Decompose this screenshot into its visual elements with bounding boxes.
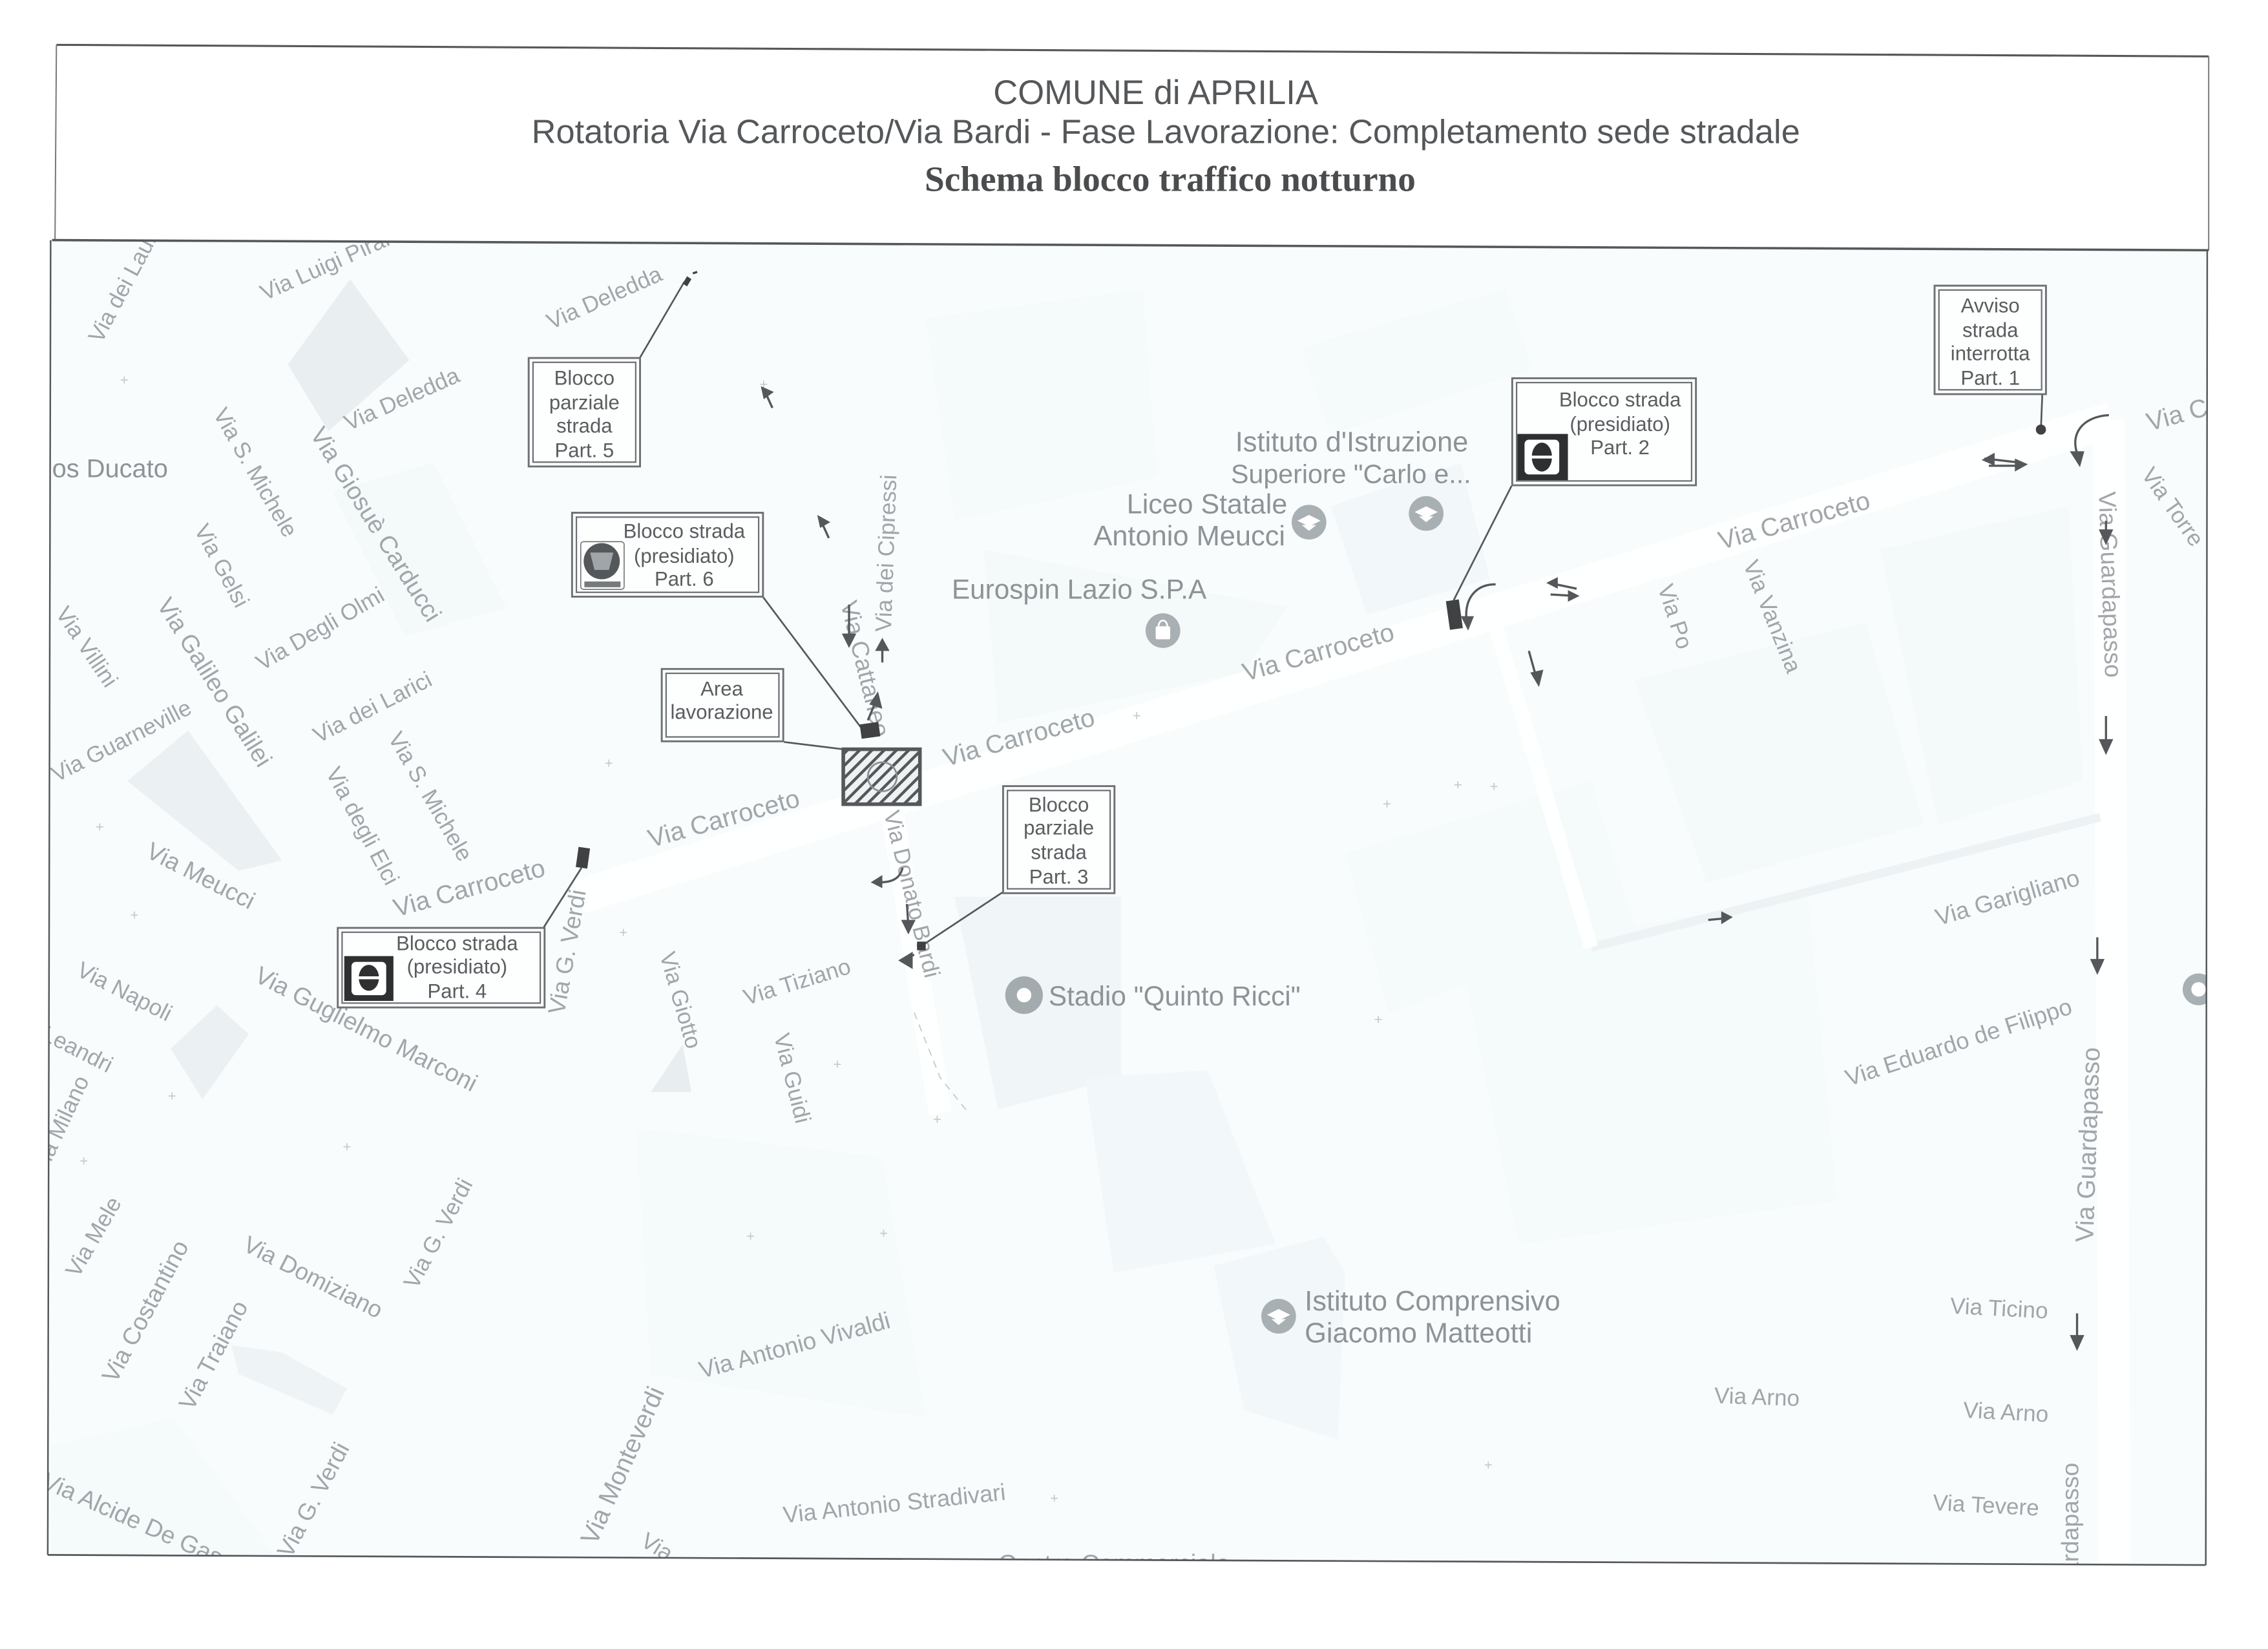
callout: Blocco parziale Part. 5 [529,272,697,467]
street: Via Carroceto 2: Via Carroceto [645,784,803,853]
place label: Liceo Statale [1093,489,1287,552]
street: Via G. Verdi mid: Via G. Verdi [399,1174,478,1292]
arrow: curved Part. 1 [2070,415,2109,467]
street: Via Carroceto 4: Via Carroceto [1239,618,1397,687]
place label: os Ducato: os Ducato [52,455,168,483]
title: Comune di Aprilia: COMUNE di APRILIA [993,74,1318,112]
street: Via Tevere: Via Tevere [1932,1490,2040,1521]
arrow: south Via Ticino [2070,1314,2084,1351]
minor map markers: + [1133,708,1141,724]
icon: school Liceo [1292,505,1327,540]
minor map markers: + [79,1153,88,1169]
place label: Eurospin: Eurospin Lazio S.P.A [952,574,1207,605]
street: Via Mele: Via Mele [61,1193,127,1281]
place label: Liceo Statale: Antonio Meucci [1093,521,1285,552]
street: Via Vanzina: Via Vanzina [1738,556,1806,677]
arrow: south Via Guardapasso 2 [2099,716,2113,755]
place label: Istituto Comprensivo: Istituto Comprensivo [1305,1286,1560,1317]
street: Via Guarneville: Via Guarneville [47,695,196,787]
street: Via dei Lauri: Via dei Lauri [83,224,165,347]
callout: Avviso strada interrotta Part. 1: Part. 1 [1960,366,2020,389]
callout: Blocco strada Part. 2 [1446,378,1696,630]
street: Via Carroceto 5: Via Carroceto [1715,486,1873,555]
street: Via Ticino: Via Ticino [1949,1294,2049,1323]
callout: Blocco parziale Part. 5: Blocco [554,366,614,389]
callout: Blocco strada Part. 2: Part. 2 [1590,436,1650,459]
callout: Blocco strada Part. 6 [572,513,880,739]
minor map markers: + [879,1225,888,1241]
street: Via Eduardo de Filippo: Via Eduardo de Filippo [1842,993,2075,1091]
street: Via Giosuè Carducci: Via Giosuè Carducci [304,423,446,627]
place label: Istituto Comprensivo [1305,1286,1560,1349]
callout: Blocco strada Part. 6: (presidiato) [634,545,735,567]
street: Via Deledda: Via Deledda [341,362,463,436]
arrow: two way Part. 1 [1982,453,2028,472]
callout: Blocco strada Part. 4 [338,847,590,1007]
minor map markers: + [120,372,129,388]
street: Via dei Larici: Via dei Larici [309,667,436,748]
callout: Blocco strada Part. 2: (presidiato) [1570,413,1670,436]
street: Via degli Elci: Via degli Elci [321,763,404,889]
arrow: Via Bardi south west [898,952,914,969]
street: Via Degli Olmi: Via Degli Olmi [252,582,388,676]
minor map markers: + [933,1111,941,1127]
minor map markers: + [96,819,104,835]
minor map markers: + [759,376,768,392]
street: Via Traiano: Via Traiano [174,1296,253,1414]
callout: Blocco parziale Part. 5: parziale [549,391,620,414]
subtitle: fase lavorazione: Rotatoria Via Carroceto/Via Bardi - Fase Lavorazione: Completamento sede stradale [532,114,1800,151]
minor map markers: + [605,755,613,772]
callout: Blocco strada Part. 4: (presidiato) [407,956,507,978]
callout: Avviso strada interrotta Part. 1: interrotta [1951,342,2030,364]
callout: Blocco parziale Part. 3: Part. 3 [1029,866,1088,888]
arrow: south Via Guardapasso 3 [2090,938,2105,975]
callout: Blocco strada Part. 4: Part. 4 [428,980,487,1003]
street: Via Antonio Vivaldi: Via Antonio Vivaldi [696,1307,893,1383]
icon: place marker right edge [2183,974,2214,1005]
heading: schema blocco traffico: Schema blocco traffico notturno [925,159,1416,198]
street: Via Guglielmo Marconi: Via Guglielmo Marconi [251,961,481,1097]
street: Via Deledda north: Via Deledda [543,261,666,335]
place label: Istituto Comprensivo: Giacomo Matteotti [1305,1318,1532,1349]
callout: Avviso strada interrotta Part. 1 [1935,286,2046,435]
street: Via Meucci: Via Meucci [142,837,260,914]
arrow: Via Bardi south [901,904,916,934]
street: Centro Commerciale: Centro Commerciale [998,1550,1230,1578]
street: Via Domiziano: Via Domiziano [239,1231,387,1323]
header panel [55,45,2209,250]
place label: Istituto d'Istruzione: Superiore "Carlo e... [1231,459,1471,489]
minor map markers: + [746,1228,755,1245]
street: Via Villini: Via Villini [50,602,123,692]
street: Via Leandri: Via Leandri [3,1003,117,1078]
arrow: Via Bardi west turn [871,868,903,888]
street: Via Guardapasso bottom: Via Guardapasso [2057,1463,2084,1649]
street: Via Alcide De Gasperi: Via Alcide De Gasperi [38,1467,264,1587]
street: Via Garigliano: Via Garigliano [1933,865,2083,930]
street: Via G. Verdi south: Via G. Verdi [272,1438,355,1562]
callout: Blocco strada Part. 2: Blocco strada [1559,388,1681,411]
arrow: south Via Cattaneo [842,605,856,648]
arrow: north Via Deledda [761,386,774,408]
minor map markers: + [619,925,627,941]
street: Via Tiziano: Via Tiziano [740,954,854,1010]
icon: school Matteotti [1261,1299,1296,1334]
place label: Liceo Statale: Liceo Statale [1127,489,1287,520]
callout: Blocco parziale Part. 3: strada [1031,841,1087,864]
arrow: curved Part. 2 [1461,584,1496,631]
street: Via S. Michele: Via S. Michele [208,404,302,541]
callout: Blocco parziale Part. 3: parziale [1024,817,1094,839]
street: Via Gelsi: Via Gelsi [189,520,254,612]
street: Via Arno east: Via Arno [1962,1398,2049,1427]
callout: Blocco parziale Part. 5: strada [556,414,613,437]
street: Via Guardapasso south: Via Guardapasso [2071,1047,2106,1243]
minor map markers: + [130,907,139,923]
icon: shop Eurospin [1146,613,1181,648]
street: Via Napoli: Via Napoli [73,957,176,1026]
arrow: east Via Garigliano [1708,911,1733,924]
frame lines: map border [48,240,2209,1565]
street: Via Guardapasso north: Via Guardapasso [2094,491,2127,678]
minor map markers: + [343,1139,352,1155]
icon: stadium [1005,976,1043,1014]
street: Via Torre: Via Torre [2136,463,2209,551]
arrow: two way Via Carroceto [1546,577,1579,602]
work area: hatched square [843,750,920,804]
callout: Area lavorazione [662,669,783,741]
arrow: near roundabout north [868,691,883,720]
minor map markers: + [1383,795,1391,812]
minor map markers: + [833,1056,841,1072]
street: Via Carroceto 3: Via Carroceto [940,703,1098,772]
minor map markers: + [1490,778,1498,794]
minor map markers: + [168,1087,176,1104]
leader: Area lavorazione [784,742,843,750]
street: Via Luigi Pirandello: Via Luigi Pirandello [257,204,444,306]
street: Via Costantino: Via Costantino [96,1235,194,1387]
street: Via S. Michele south: Via S. Michele [383,728,478,866]
arrow: north Via dei Cipressi [875,638,890,662]
callout: Avviso strada interrotta Part. 1: strada [1962,319,2019,342]
panel: map [48,241,2206,1564]
callout: Blocco strada Part. 4: Blocco strada [396,932,518,955]
minor map markers: + [1374,1011,1383,1027]
map base [48,240,2207,1565]
street: Via Milano: Via Milano [26,1072,94,1178]
callout: Area lavorazione: Area [700,678,744,700]
minor map markers: + [1454,777,1462,793]
icon: school Istituto [1409,496,1444,531]
place label: Istituto d'Istruzione [1231,426,1471,489]
minor map markers: + [1484,1456,1493,1473]
street: Via dei Cipressi: Via dei Cipressi [871,474,901,633]
callout: Blocco strada Part. 6: Blocco strada [624,520,746,543]
street: Via Giotto: Via Giotto [655,949,706,1051]
arrow: south Via Guardapasso 1 [2099,521,2113,545]
street: Via Guidi: Via Guidi [769,1031,815,1126]
street: Via Carroceto 1: Via Carroceto [390,854,548,923]
callout: Blocco parziale Part. 5: Part. 5 [555,439,614,461]
callout: Avviso strada interrotta Part. 1: Avviso [1961,295,2020,317]
callout: Area lavorazione: lavorazione [670,701,773,724]
minor map markers: + [1050,1490,1058,1506]
street: Via Cattaneo: Via Cattaneo [835,598,896,739]
arrow: north Via Cattaneo 1 [817,515,830,538]
place label: Istituto d'Istruzione: Istituto d'Istruzione [1235,426,1468,457]
street: Via Monteverdi: Via Monteverdi [575,1382,670,1549]
street labels [48,239,2206,1566]
place label: Stadio: Stadio "Quinto Ricci" [1049,981,1301,1011]
callout: Blocco parziale Part. 3: Blocco [1029,793,1089,816]
street: Via Arno west: Via Arno [1714,1383,1800,1411]
street: Via Galileo Galilei: Via Galileo Galilei [151,593,277,772]
callout: Blocco parziale Part. 3 [917,786,1115,951]
street: Via G. Verdi central: Via G. Verdi [543,887,591,1016]
minor map markers [79,372,1498,1506]
map blocks and roads [127,279,2101,1414]
street: Via: Via [636,1528,678,1566]
street: Via Po: Via Po [1653,581,1697,652]
arrows: traffic diversions [761,386,2113,1351]
callout: Blocco strada Part. 6: Part. 6 [655,568,714,591]
street: Via Donato Bardi: Via Donato Bardi [879,808,945,980]
street: Via Antonio Stradivari: Via Antonio Stradivari [782,1478,1007,1528]
arrow: south Via Po [1529,651,1543,687]
